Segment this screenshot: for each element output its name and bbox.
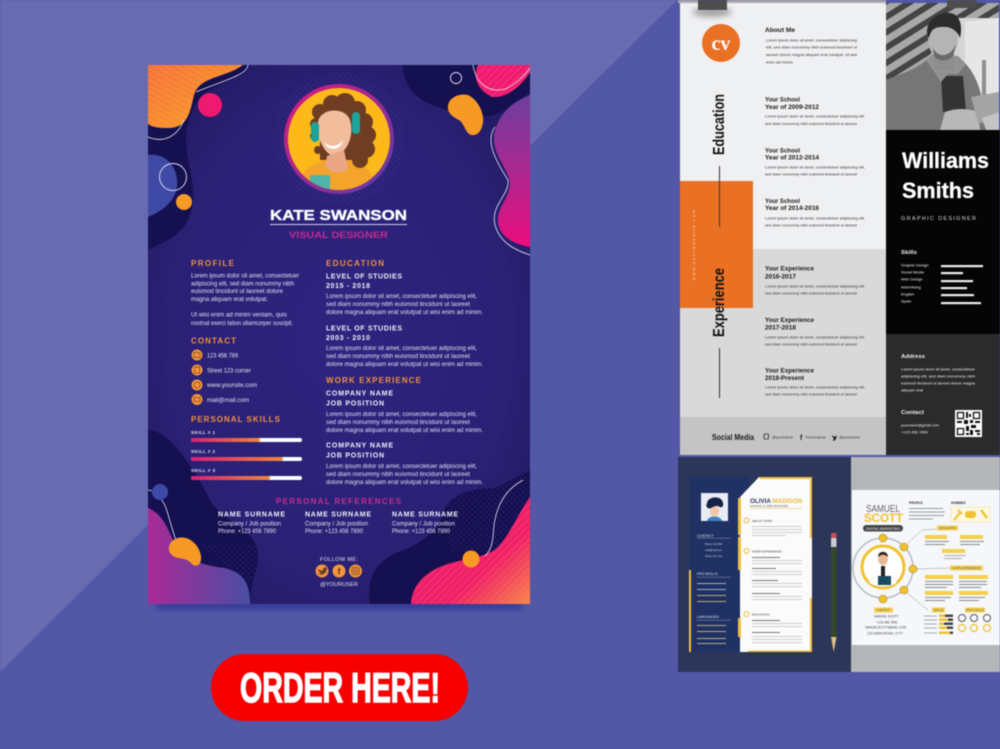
- section: profile: magna aliquam erat volutpat.: [191, 297, 268, 303]
- section: profile: PROFILE: [191, 259, 235, 268]
- section: personal references: [218, 497, 458, 535]
- contact block: SAMUELSCOTT@MAIL.COM: [865, 626, 906, 630]
- social: follow me: FOLLOW ME:: [320, 557, 358, 563]
- left column text: CONTACT: [697, 534, 715, 538]
- section: education: dolore magna aliquam erat volutpat ut wisi enim ad minim.: [326, 310, 483, 316]
- experience entries: Lorem ipsum dolor sit amet, consectetuer adipiscing elit,: [765, 334, 865, 340]
- sheet navy column: [689, 477, 749, 652]
- education entries: Year of 2012-2014: [765, 154, 819, 162]
- left column text: Street 123, City: [705, 555, 723, 558]
- skills list: Advertising: [901, 284, 921, 290]
- button: order here: ORDER HERE!: [240, 664, 440, 711]
- section: work experience: Lorem ipsum dolor sit amet, consectetuer adipiscing elit,: [326, 412, 477, 418]
- address: Address: [901, 354, 925, 360]
- skills list: Skills: [901, 250, 917, 256]
- resume drop shadow: [156, 602, 522, 609]
- yellow accents: [689, 477, 812, 652]
- binder clip: [692, 0, 732, 17]
- dashed connectors: [907, 529, 950, 610]
- profile: PROFILE: [909, 501, 923, 505]
- section: education: LEVEL OF STUDIES: [326, 274, 402, 280]
- name: OLIVIA MADISON: [750, 498, 802, 505]
- role pill: DIGITAL MARKETING: [866, 527, 900, 531]
- name underline: [270, 224, 407, 225]
- address: adipiscing elit, sed diam nonummy nibh: [901, 374, 975, 378]
- address: Lorem ipsum dolor sit amet, consectetuer: [901, 366, 976, 372]
- section: work experience: sed diam nonummy nibh euismod tincidunt ut laoreet: [326, 420, 470, 426]
- right column sections: ABOUT START: [752, 519, 773, 523]
- section: education: dolore magna aliquam erat volutpat ut wisi enim ad minim.: [326, 362, 483, 368]
- experience entries: Lorem ipsum dolor sit amet, consectetuer adipiscing elit,: [765, 284, 865, 288]
- experience entries: 2017-2018: [765, 324, 796, 332]
- name: KATE SWANSON: [270, 207, 407, 224]
- right column sections: EDUCATION: [752, 612, 769, 616]
- social media footer: Yourname: [805, 434, 827, 440]
- section: profile: Lorem ipsum dolor sit amet, consectetuer: [191, 274, 299, 280]
- section: work experience: Lorem ipsum dolor sit amet, consectetuer adipiscing elit,: [326, 464, 477, 470]
- left column text: [697, 534, 731, 644]
- section: profile: nostrud exerci tation ullamcorper suscipit.: [191, 321, 293, 327]
- section: education: 2003 - 2010: [326, 335, 370, 342]
- heading: Education: Education: [711, 94, 728, 155]
- section: work experience: JOB POSITION: [326, 452, 384, 460]
- binder clip: [947, 0, 977, 8]
- experience entries: sed diam nonummy nibh euismod tincidunt ut laoreet: [765, 392, 858, 396]
- education entries: Your School: [765, 96, 800, 104]
- section: personal references: NAME SURNAME: [218, 512, 285, 518]
- section: education: EDUCATION: [326, 259, 384, 268]
- left column text: LANGUAGES: [697, 615, 719, 619]
- section: profile: Ut wisi enim ad minim veniam, quis: [191, 312, 287, 318]
- contact: yourname@gmail.com: [901, 422, 940, 428]
- section: work experience: WORK EXPERIENCE: [326, 376, 422, 385]
- education entries: Lorem ipsum dolor sit amet, consectetuer adipiscing elit,: [765, 114, 865, 118]
- skills list: [901, 250, 983, 304]
- skills bars: [924, 608, 953, 634]
- experience entries: sed diam nonummy nibh euismod tincidunt ut laoreet: [765, 342, 858, 346]
- section: education: sed diam nonummy nibh euismod tincidunt ut laoreet: [326, 354, 470, 360]
- divider: education: [719, 166, 720, 227]
- experience entries: Your Experience: [765, 368, 814, 374]
- profile photo: [273, 73, 405, 205]
- education pills: EDUCATION: [939, 526, 956, 530]
- dark block: [886, 334, 1000, 455]
- orange blobs: [169, 94, 483, 566]
- heading: Experience: Experience: [711, 268, 728, 337]
- section: personal skills: SKILL # 3: [191, 468, 215, 473]
- name: SAMUEL: [866, 504, 900, 515]
- skills list: Social Media: [901, 270, 925, 274]
- experience entries: Your Experience: [765, 317, 814, 324]
- social: follow me: @YOURUSER: [320, 582, 358, 588]
- decorative blobs: [148, 65, 530, 604]
- hobbies: HOBBIES: [951, 501, 966, 505]
- skills list: Web Design: [901, 276, 923, 282]
- panel: Samuel Scott resume: SCOTT: [864, 511, 904, 525]
- section: personal references: PERSONAL REFERENCES: [276, 497, 402, 506]
- section: work experience: dolore magna aliquam erat volutpat ut wisi enim ad minim.: [326, 428, 483, 434]
- section: contact: Street 123 corner: [207, 368, 251, 374]
- education entries: [765, 96, 865, 228]
- divider: experience: [719, 348, 720, 398]
- section: profile: euismod tincidunt ut laoreet dolore: [191, 289, 284, 295]
- button: order here: [211, 654, 468, 721]
- section: education: Lorem ipsum dolor sit amet, consectetuer adipiscing elit,: [326, 294, 477, 300]
- section: work experience: sed diam nonummy nibh euismod tincidunt ut laoreet: [326, 472, 470, 478]
- section: education: [326, 259, 483, 368]
- role: GRAPHIC DESIGNER: [901, 216, 976, 222]
- contact block: CONTACT: [877, 608, 890, 612]
- experience entries: Lorem ipsum dolor sit amet, consectetuer adipiscing elit,: [765, 384, 865, 390]
- panel: Williams Smiths CV right page: [886, 0, 1000, 455]
- experience entries: 2016-2017: [765, 274, 796, 280]
- section: personal references: Phone: +123 456 7890: [305, 529, 364, 535]
- section: education: Lorem ipsum dolor sit amet, consectetuer adipiscing elit,: [326, 346, 477, 352]
- contact: [901, 410, 940, 434]
- section: profile: adipiscing elit, sed diam nonummy nibh: [191, 282, 294, 288]
- education entries: Your School: [765, 148, 800, 154]
- about me: elit, sed diam nonummy nibh euismod tincidunt ut: [766, 44, 858, 50]
- about me: Lorem ipsum dolor sit amet, consectetuer adipiscing: [766, 38, 857, 42]
- orange block: [680, 181, 753, 308]
- education pills: [925, 526, 984, 559]
- experience entries: 2018-Present: [765, 375, 805, 382]
- work experience pills: [925, 566, 988, 601]
- name: Smiths: Smiths: [902, 178, 974, 203]
- skills list: Spain: [901, 298, 911, 304]
- about me: [765, 27, 858, 64]
- social: follow me: [316, 557, 362, 588]
- section: personal references: Phone: +123 456 7890: [218, 529, 277, 535]
- left column text: mail@mail.com: [705, 549, 722, 552]
- experience entries: Your Experience: [765, 266, 814, 272]
- role pill: [863, 525, 903, 532]
- skills bars: SKILLS: [934, 608, 943, 612]
- right column sections: [744, 518, 802, 643]
- man photo: [886, 3, 999, 130]
- name: Williams: Williams: [902, 148, 989, 173]
- social media footer: @yourname: [839, 434, 861, 440]
- social media footer: @yourname: [772, 434, 794, 440]
- soft skills rings: [958, 608, 990, 632]
- panel: Williams Smiths CV left page: [678, 0, 886, 455]
- section: contact: CONTACT: [191, 336, 236, 346]
- section: personal references: Company / Job position: [392, 522, 455, 528]
- job title: VISUAL DESIGNER: [289, 230, 389, 240]
- address: [901, 354, 976, 392]
- section: personal skills: SKILL # 2: [191, 449, 215, 454]
- section: contact: 123 456 789: [207, 354, 239, 360]
- panel: Samuel Scott resume: [851, 457, 1000, 672]
- section: personal references: Company / Job position: [305, 522, 368, 528]
- left column text: PRO SKILLS: [697, 572, 718, 576]
- section: education: sed diam nonummy nibh euismod tincidunt ut laoreet: [326, 302, 470, 308]
- experience entries: sed diam nonummy nibh euismod tincidunt ut laoreet: [765, 290, 858, 296]
- section: contact: [191, 336, 257, 405]
- section: work experience: COMPANY NAME: [326, 442, 393, 450]
- section: education: LEVEL OF STUDIES: [326, 326, 402, 332]
- address: euismod tincidunt ut laoreet dolore magna: [901, 380, 976, 386]
- QR code: [955, 410, 982, 437]
- section: personal skills: [191, 415, 302, 480]
- contact block: [865, 608, 906, 636]
- education entries: Year of 2014-2016: [765, 205, 819, 212]
- hobbies: [951, 501, 990, 522]
- address: aliquam erat: [901, 388, 924, 392]
- role: GRAPHIC & WEB DESIGNER: [750, 504, 788, 508]
- section: personal skills: SKILL # 1: [191, 430, 215, 435]
- panel: Olivia Madison resume: [678, 457, 851, 672]
- panel: Kate Swanson resume: [148, 65, 530, 609]
- about me: enim ad minim: [766, 60, 794, 64]
- education entries: Your School: [765, 198, 800, 205]
- section: personal references: Phone: +123 456 7890: [392, 529, 451, 535]
- portrait with timeline arc: [853, 534, 917, 603]
- social media footer: f: [800, 435, 803, 442]
- experience entries: [765, 266, 865, 396]
- education entries: Lorem ipsum dolor sit amet, consectetuer adipiscing elit,: [765, 164, 865, 170]
- section: work experience: JOB POSITION: [326, 400, 384, 408]
- section: contact: www.yoursite.com: [206, 383, 257, 389]
- sheet white column: [740, 477, 812, 652]
- section: work experience: dolore magna aliquam erat volutpat ut wisi enim ad minim.: [326, 480, 483, 486]
- avatar: [701, 493, 728, 521]
- work experience pills: WORK EXPERIENCE: [953, 566, 980, 570]
- pencil: [831, 533, 836, 652]
- soft skills rings: SOFT SKILLS: [966, 608, 984, 612]
- section: profile: [191, 259, 299, 327]
- cv logo: [702, 24, 740, 62]
- contact block: SAMUEL SCOTT: [874, 614, 899, 618]
- education entries: sed diam nonummy nibh euismod tincidunt ut laoreet: [765, 121, 858, 126]
- contact block: +123 456 7890: [876, 620, 898, 624]
- skills list: Graphic Design: [901, 262, 929, 268]
- education entries: Year of 2009-2012: [765, 104, 819, 111]
- contact: +123 456 7890: [901, 430, 929, 434]
- profile: [909, 501, 945, 520]
- section: contact: mail@mail.com: [207, 398, 249, 404]
- skills list: English: [901, 292, 914, 296]
- vertical website text: www.yourwebsite.com: [691, 209, 696, 280]
- section: personal references: Company / Job position: [218, 522, 281, 528]
- section: work experience: [326, 376, 483, 486]
- about me: About Me: [765, 27, 795, 34]
- white outline curves: [148, 65, 530, 556]
- right column sections: WORK EXPERIENCE: [752, 550, 782, 554]
- contact: Contact: [901, 410, 924, 416]
- education entries: sed diam nonummy nibh euismod tincidunt ut laoreet: [765, 172, 858, 176]
- decorative circles: [152, 72, 480, 568]
- section: personal references: NAME SURNAME: [392, 512, 458, 518]
- about me: laoreet dolore magna aliquam erat volutpat. Ut wisi: [766, 52, 857, 57]
- section: personal references: NAME SURNAME: [305, 512, 371, 518]
- resume background: [148, 65, 530, 604]
- contact block: 123 MAIN ROAD, CITY: [867, 632, 904, 636]
- section: work experience: COMPANY NAME: [326, 390, 393, 398]
- education entries: sed diam nonummy nibh euismod tincidunt ut laoreet: [765, 222, 858, 228]
- left column text: Phone 123 456: [705, 543, 723, 546]
- section: personal skills: PERSONAL SKILLS: [191, 415, 281, 424]
- cv logo: cv: [712, 33, 730, 55]
- black block: [886, 130, 1000, 334]
- education entries: Lorem ipsum dolor sit amet, consectetuer adipiscing elit,: [765, 216, 865, 220]
- social media footer: Social Media: [712, 433, 754, 442]
- section: education: 2015 - 2018: [326, 283, 370, 290]
- name rule: [750, 507, 802, 510]
- social: follow me: f: [338, 566, 342, 576]
- social media footer: [712, 433, 861, 442]
